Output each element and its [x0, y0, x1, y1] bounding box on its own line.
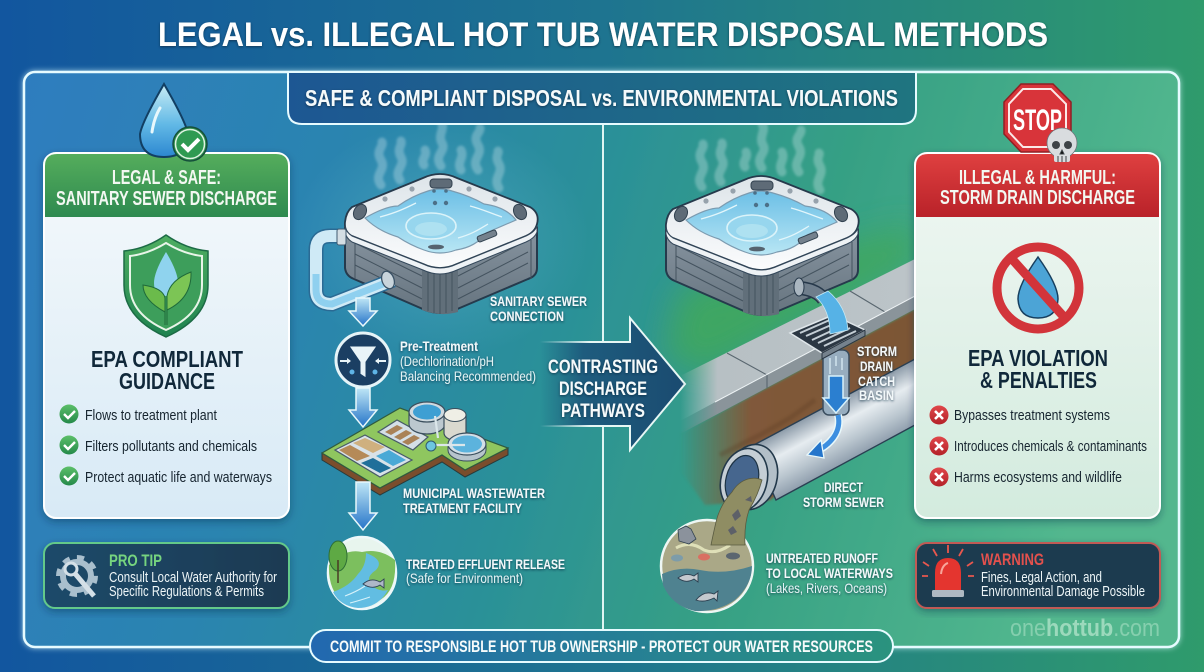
catch basin and grate: [790, 315, 865, 415]
panel: legal card: [44, 153, 289, 518]
labels: sanitary path: (Dechlorination/pH: [400, 353, 494, 369]
icon: no water: [997, 247, 1079, 329]
municipal treatment plant: [322, 402, 508, 495]
heading: EPA compliant: [91, 346, 243, 394]
watermark: onehottub.com: [1010, 615, 1160, 642]
heading: EPA violation: [968, 345, 1108, 393]
tub outlet and water flow: [794, 278, 848, 334]
arrow text: PATHWAYS: [561, 401, 645, 422]
header: legal: SANITARY SEWER DISCHARGE: [56, 188, 277, 210]
list: harms: Harms ecosystems and wildlife: [954, 469, 1122, 486]
arrow text: CONTRASTING: [548, 357, 658, 378]
big contrast arrow: [540, 318, 685, 450]
labels: sanitary path: TREATED EFFLUENT RELEASE: [406, 556, 565, 572]
header: legal: [45, 154, 288, 217]
labels: storm path: DRAIN: [860, 358, 893, 374]
labels: storm path: DIRECT: [824, 479, 863, 495]
labels: storm path: STORM: [857, 343, 897, 359]
heading: EPA compliant: GUIDANCE: [119, 368, 215, 394]
icon: stop sign with skull: STOP: [1013, 104, 1062, 137]
arrow: into sewer: [807, 415, 839, 458]
labels: storm path: (Lakes, Rivers, Oceans): [766, 580, 887, 596]
right scene: grass: [665, 225, 915, 372]
heading: EPA violation: & PENALTIES: [980, 367, 1097, 393]
storm sewer pipe: [714, 359, 915, 517]
callout: pro tip: Specific Regulations & Permits: [109, 584, 264, 600]
polluted outflow: [711, 478, 762, 545]
hot tub: illegal side: [666, 124, 859, 316]
labels: storm path: UNTREATED RUNOFF: [766, 550, 878, 566]
heading: EPA compliant: EPA COMPLIANT: [91, 346, 243, 372]
sanitary pipe connection: [316, 229, 397, 304]
arrow: to treatment plant: [349, 388, 377, 427]
arrow text: DISCHARGE: [559, 379, 647, 400]
labels: sanitary path: MUNICIPAL WASTEWATER: [403, 485, 545, 501]
arrow: to effluent release: [349, 482, 377, 530]
icon: red siren: [922, 545, 974, 597]
labels: storm path: STORM SEWER: [803, 494, 884, 510]
header: illegal: [916, 154, 1159, 217]
callout: warning: [916, 543, 1160, 608]
header: illegal: STORM DRAIN DISCHARGE: [940, 187, 1135, 209]
callout: warning: Fines, Legal Action, and: [981, 570, 1102, 586]
labels: storm path: [766, 343, 897, 596]
header: legal: LEGAL & SAFE:: [112, 167, 221, 189]
hot tub: legal side: [345, 122, 538, 314]
icon: pre-treatment filter: [336, 333, 390, 387]
callout: pro tip: Consult Local Water Authority for: [109, 570, 277, 586]
footer pill: COMMIT TO RESPONSIBLE HOT TUB OWNERSHIP - PROTECT OUR WATER RESOURCES: [330, 637, 873, 656]
labels: sanitary path: (Safe for Environment): [406, 570, 523, 586]
tub glow: [290, 120, 590, 360]
list: harms: Bypasses treatment systems: [954, 407, 1110, 424]
list: benefits: Protect aquatic life and waterways: [85, 469, 272, 486]
list: harms: [930, 406, 1147, 486]
header: illegal: ILLEGAL & HARMFUL:: [959, 167, 1116, 189]
labels: storm path: CATCH: [858, 373, 895, 389]
list: benefits: Filters pollutants and chemicals: [85, 438, 257, 455]
storm drain ground: [680, 259, 915, 505]
arrow: catch basin: [823, 376, 849, 413]
top banner: [288, 72, 916, 124]
labels: sanitary path: Pre-Treatment: [400, 338, 478, 354]
icon: stop sign with skull: [1004, 84, 1077, 162]
panel: illegal card: [915, 153, 1160, 518]
labels: sanitary path: TREATMENT FACILITY: [403, 500, 523, 516]
callout: pro tip: [44, 543, 289, 608]
icon: water drop with check: [140, 84, 207, 161]
labels: storm path: TO LOCAL WATERWAYS: [766, 565, 893, 581]
list: harms: Introduces chemicals & contaminants: [954, 438, 1147, 455]
icon: clean river: [328, 537, 396, 609]
footer pill: [310, 630, 893, 662]
arrow: to pre-treatment: [349, 298, 377, 326]
icon: green shield: [124, 235, 208, 337]
title: LEGAL vs. ILLEGAL HOT TUB WATER DISPOSAL METHODS: [158, 16, 1048, 54]
center divider: [602, 124, 604, 632]
labels: sanitary path: [400, 293, 587, 586]
icon: gear and wrench: [59, 558, 95, 596]
labels: sanitary path: SANITARY SEWER: [490, 293, 587, 309]
polluted waterway circle: [661, 520, 753, 612]
callout: warning: WARNING: [981, 550, 1044, 569]
heading: EPA violation: EPA VIOLATION: [968, 345, 1108, 371]
callout: warning: Environmental Damage Possible: [981, 584, 1145, 600]
labels: sanitary path: Balancing Recommended): [400, 368, 536, 384]
labels: storm path: BASIN: [859, 387, 894, 403]
callout: pro tip: PRO TIP: [109, 551, 162, 570]
list: benefits: [60, 404, 272, 486]
top banner: SAFE & COMPLIANT DISPOSAL vs. ENVIRONMENTAL VIOLATIONS: [305, 85, 898, 111]
arrow text: [548, 357, 658, 422]
labels: sanitary path: CONNECTION: [490, 308, 564, 324]
list: benefits: Flows to treatment plant: [85, 407, 218, 424]
